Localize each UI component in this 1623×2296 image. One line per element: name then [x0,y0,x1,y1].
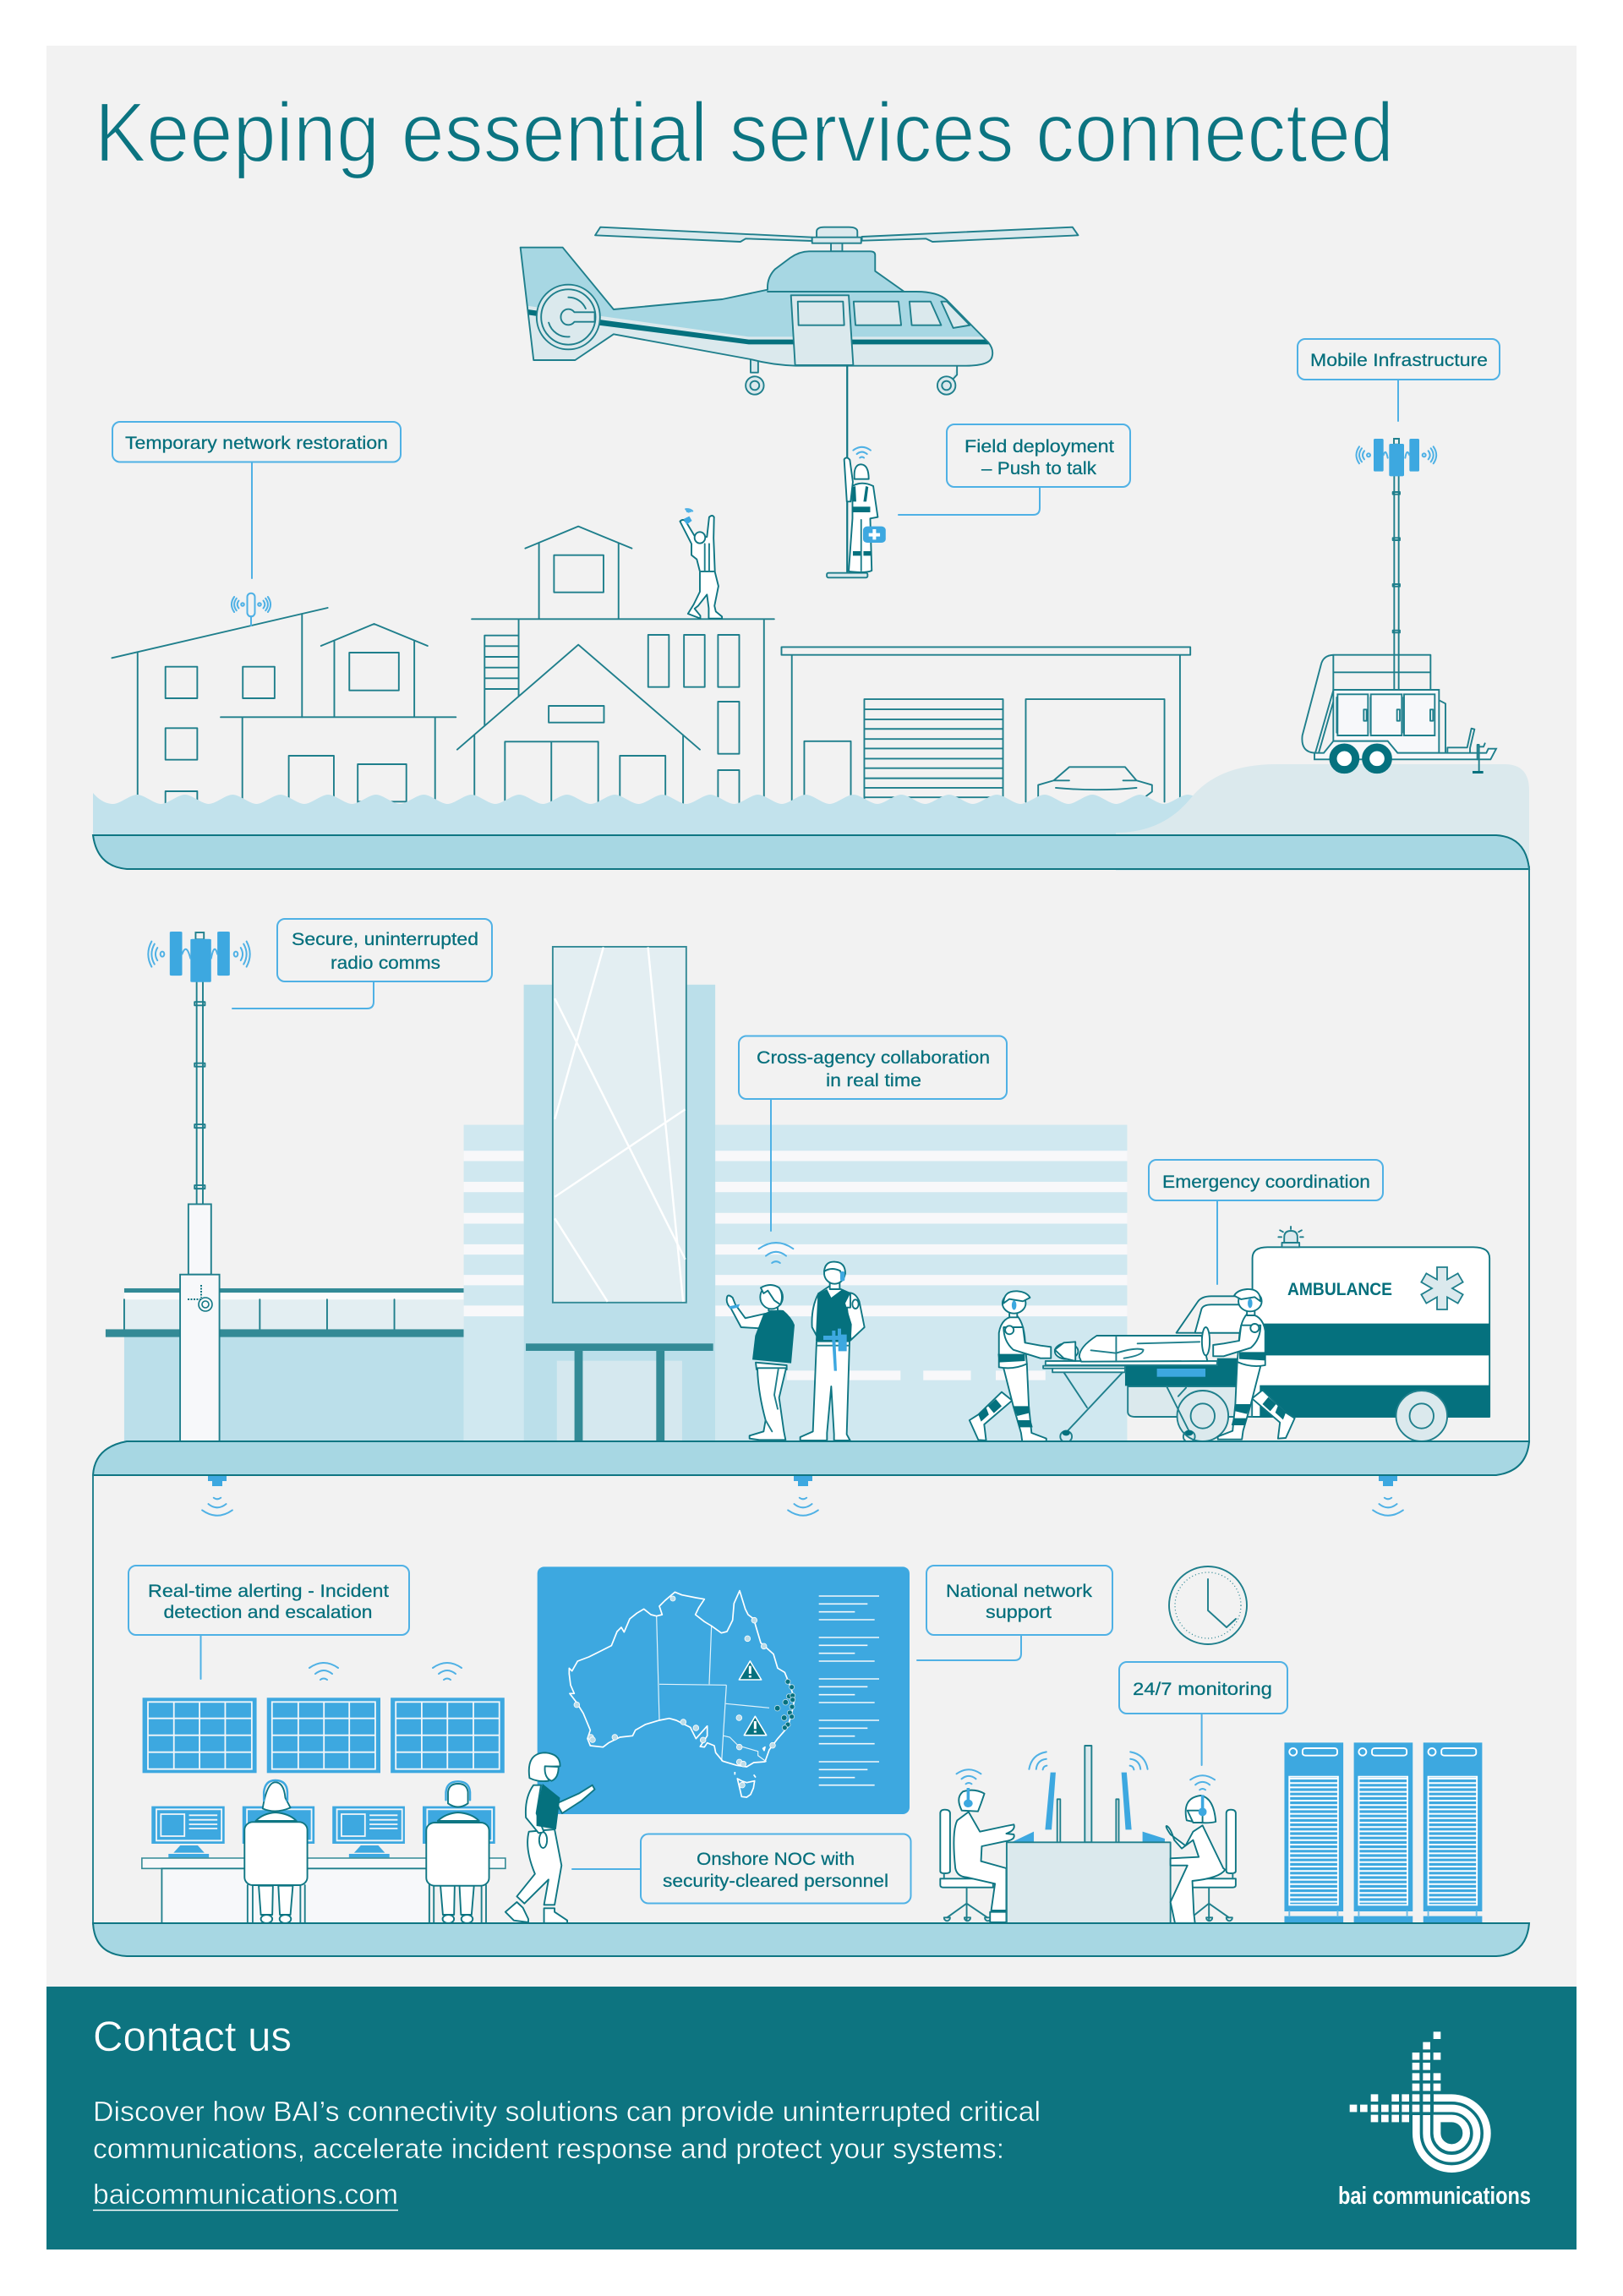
callout: Field deployment [899,424,1130,515]
person: civilian pointing [727,1285,795,1440]
callout: Cross-agency collaboration: Cross-agency collaboration [757,1047,990,1068]
stretcher with patient [1043,1327,1217,1442]
callout: Real-time alerting: Real-time alerting - Incident [148,1581,389,1601]
footer link: baicommunications.com [93,2179,398,2211]
person: police officer [801,1262,865,1440]
callout: National network support: support [986,1602,1052,1622]
map panel [538,1566,910,1814]
person on winch with medical bag [844,447,886,572]
left wall line [92,1475,94,1924]
person: woman presenting [505,1752,595,1923]
callout: Field deployment: Field deployment [965,436,1114,456]
footer heading: Contact us [93,2013,292,2060]
text: AMBULANCE: AMBULANCE [1287,1280,1392,1299]
callout: Cross-agency collaboration: in real time [826,1070,921,1091]
operators desk with monitors [142,1807,505,1923]
server racks [1284,1742,1482,1923]
floor platform 3 [93,1923,1529,1956]
footer text [93,2096,1041,2165]
footer text: Discover how BAI’s connectivity solutions can provide uninterrupted critical [93,2096,1041,2128]
callout: Secure, uninterrupted radio comms: radio comms [331,953,440,973]
icon: mini logo on tower [188,1285,212,1311]
Australia map [569,1591,795,1797]
callout: Onshore NOC: Onshore NOC with [697,1849,855,1869]
building: warehouse with car [781,647,1190,801]
logo wordmark: bai communications [1338,2183,1531,2210]
callout: Mobile Infrastructure: Mobile Infrastructure [1310,350,1488,370]
callout: Temporary network restoration: Temporary network restoration [125,433,388,453]
video wall screens [143,1697,505,1773]
icon: wifi above responders [759,1243,793,1263]
ambulance [1125,1227,1489,1441]
radio tower [170,932,230,1441]
buildings: flooded neighbourhood [112,527,774,806]
callout: Onshore NOC [572,1834,911,1904]
callout: National network support: National network [946,1581,1092,1601]
title: Keeping essential services connected [95,85,1394,180]
right wall line [1528,866,1530,1442]
helicopter [521,227,1078,577]
icon: star of life [1421,1267,1463,1309]
callout: Secure, uninterrupted radio comms [232,919,492,1009]
icon: clock [1169,1566,1247,1644]
callout: Cross-agency collaboration [739,1036,1007,1231]
footer band [46,1987,1577,2250]
left low building [106,1288,464,1441]
callout: Emergency coordination: Emergency coordination [1162,1172,1370,1192]
callout: 24/7 monitoring [1119,1662,1287,1765]
person on roof waving [680,508,722,619]
footer text: communications, accelerate incident response and protect your systems: [93,2134,1004,2165]
hospital building [464,947,1127,1441]
floor platform 1 [93,835,1529,869]
callout: Real-time alerting: detection and escalation [164,1602,372,1622]
callout: Emergency coordination [1149,1160,1383,1284]
floor platform 2 [93,1441,1529,1475]
operators seated from behind [244,1780,489,1923]
icon: wifi over desk [957,1749,1215,1790]
paramedics [970,1289,1295,1441]
twin desk with monitors and operators [940,1746,1236,1923]
panel: background [46,46,1577,1987]
flood water [93,793,1260,841]
logo [1350,2031,1487,2169]
icon: roof antenna [232,593,270,626]
callout: Real-time alerting [128,1566,409,1679]
callout: Field deployment: – Push to talk [981,458,1096,478]
callout: Mobile Infrastructure [1298,339,1500,421]
hill [1116,764,1529,871]
callout: Secure, uninterrupted radio comms: Secure, uninterrupted [292,929,478,949]
sensors under floor [202,1476,1403,1516]
callout: Temporary network restoration [112,422,401,578]
icon: wifi above screens [309,1663,462,1680]
callout: Onshore NOC: security-cleared personnel [663,1871,888,1891]
callout: National network support [917,1566,1112,1660]
mobile tower on trailer [1302,439,1496,774]
icon: signal waves on radio tower [148,942,250,967]
callout: 24/7 monitoring: 24/7 monitoring [1133,1679,1272,1699]
